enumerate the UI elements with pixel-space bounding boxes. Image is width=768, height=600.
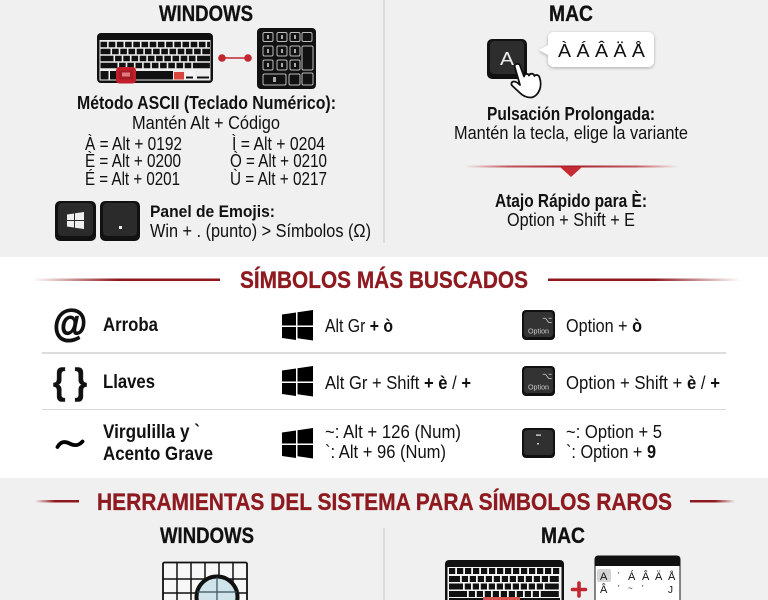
text: emoji panel <box>150 202 371 241</box>
heading: mac: MAC <box>549 1 593 26</box>
icon: tilde <box>58 442 82 447</box>
text: alt codes: Ò = Alt + 0210 <box>230 150 327 171</box>
text: emoji panel: Win + . (punto) > Símbolos (Ω) <box>150 221 371 241</box>
icon: windows logo <box>282 366 313 396</box>
icon: character viewer: A <box>600 571 608 583</box>
icon: character viewer: Â <box>642 570 650 583</box>
icon: character viewer <box>595 556 680 600</box>
row: virgulilla <box>58 422 662 465</box>
icon: plus <box>572 583 586 596</box>
panel: windows accents <box>55 1 371 241</box>
divider: top columns <box>383 0 385 243</box>
icon: dot key <box>100 201 140 241</box>
text: alt codes: È = Alt + 0200 <box>85 151 181 171</box>
icon: option key: Option <box>528 328 549 336</box>
text: alt codes: Ì = Alt + 0204 <box>232 134 325 154</box>
text: mac shortcut <box>566 422 662 462</box>
panel: most searched symbols <box>33 266 740 465</box>
text: mac shortcut: ~: Option + 5 <box>566 422 662 442</box>
panel: background symbols <box>0 257 768 478</box>
text: alt codes: É = Alt + 0201 <box>85 169 180 189</box>
icon: character viewer: ~ <box>628 584 633 593</box>
text: long press <box>454 104 688 143</box>
heading: windows: WINDOWS <box>159 1 253 26</box>
label: virgulilla: Acento Grave <box>103 444 213 465</box>
icon: mac keyboard <box>445 560 564 600</box>
icon: braces: { } <box>53 361 87 402</box>
panel: system tools <box>35 488 735 600</box>
icon: hand cursor <box>511 64 541 98</box>
icon: symbol key <box>522 428 555 458</box>
text: windows shortcut: ~: Alt + 126 (Num) <box>325 422 461 442</box>
text: mac shortcut: Option + ò <box>566 316 642 336</box>
label: arroba: Arroba <box>103 315 158 336</box>
divider: red arrow <box>465 166 678 177</box>
text: windows shortcut: Alt Gr + ò <box>325 316 393 336</box>
text: windows shortcut <box>325 422 461 462</box>
text: long press: Mantén la tecla, elige la variante <box>454 123 688 143</box>
heading: mac tools: MAC <box>541 523 585 548</box>
text: mac shortcut: `: Option + 9 <box>566 442 656 462</box>
icon: character viewer: Á <box>628 570 636 583</box>
heading: windows tools: WINDOWS <box>160 523 254 548</box>
label: virgulilla <box>103 422 213 465</box>
panel: background top <box>0 0 768 257</box>
text: alt codes: À = Alt + 0192 <box>85 134 182 154</box>
icon: character viewer: Å <box>668 570 676 583</box>
text: long press: Pulsación Prolongada: <box>487 104 655 124</box>
divider: row two <box>42 408 726 410</box>
divider: row one <box>42 352 726 354</box>
icon: windows logo <box>282 310 313 340</box>
panel: background tools <box>0 478 768 600</box>
text: quick shortcut: Option + Shift + E <box>507 210 635 230</box>
callout: accent variants: À Á Â Ä Å <box>558 41 645 61</box>
icon: option key <box>522 310 555 340</box>
icon: numpad <box>257 28 316 89</box>
label: virgulilla: Virgulilla y ` <box>103 422 200 443</box>
text: alt codes <box>85 134 327 189</box>
icon: character map <box>163 562 247 600</box>
row: arroba <box>53 303 642 345</box>
text: ascii method <box>77 93 336 133</box>
icon: keyboard <box>97 33 213 84</box>
text: quick shortcut: Atajo Rápido para È: <box>495 190 647 211</box>
text: windows shortcut: Alt Gr + Shift + è / + <box>325 373 471 393</box>
icon: option key <box>522 366 555 396</box>
icon: at sign: @ <box>53 303 87 345</box>
text: ascii method: Mantén Alt + Código <box>132 113 280 133</box>
icon: connector <box>218 54 252 62</box>
icon: windows logo <box>282 428 313 458</box>
text: emoji panel: Panel de Emojis: <box>150 202 275 221</box>
icon: character viewer: Ä <box>655 571 663 583</box>
text: windows shortcut: `: Alt + 96 (Num) <box>325 442 446 462</box>
panel: mac accents <box>454 1 688 230</box>
icon: character viewer: J <box>668 585 673 596</box>
icon: key a <box>487 39 527 79</box>
icon: option key: ⌥ <box>542 315 552 325</box>
divider: lower columns <box>383 528 385 600</box>
text: ascii method: Método ASCII (Teclado Numérico): <box>77 93 336 113</box>
heading: most searched symbols: SÍMBOLOS MÁS BUSCADOS <box>240 266 528 294</box>
icon: option key: ⌥ <box>542 371 552 381</box>
label: llaves: Llaves <box>103 372 155 393</box>
icon: option key: Option <box>528 384 549 392</box>
icon: windows key <box>55 201 96 241</box>
icon: character viewer: ' <box>618 584 620 593</box>
text: quick shortcut <box>495 190 647 230</box>
icon: character viewer: ' <box>642 584 644 593</box>
row: llaves <box>53 361 720 402</box>
text: alt codes: Ù = Alt + 0217 <box>230 168 327 189</box>
icon: key a: A <box>500 49 514 69</box>
icon: character viewer: ' <box>618 571 620 580</box>
heading: system tools: HERRAMIENTAS DEL SISTEMA PARA SÍMBOLOS RAROS <box>97 488 672 516</box>
icon: character viewer: Â <box>600 583 608 596</box>
text: mac shortcut: Option + Shift + è / + <box>566 373 720 393</box>
callout: accent variants <box>539 32 654 67</box>
